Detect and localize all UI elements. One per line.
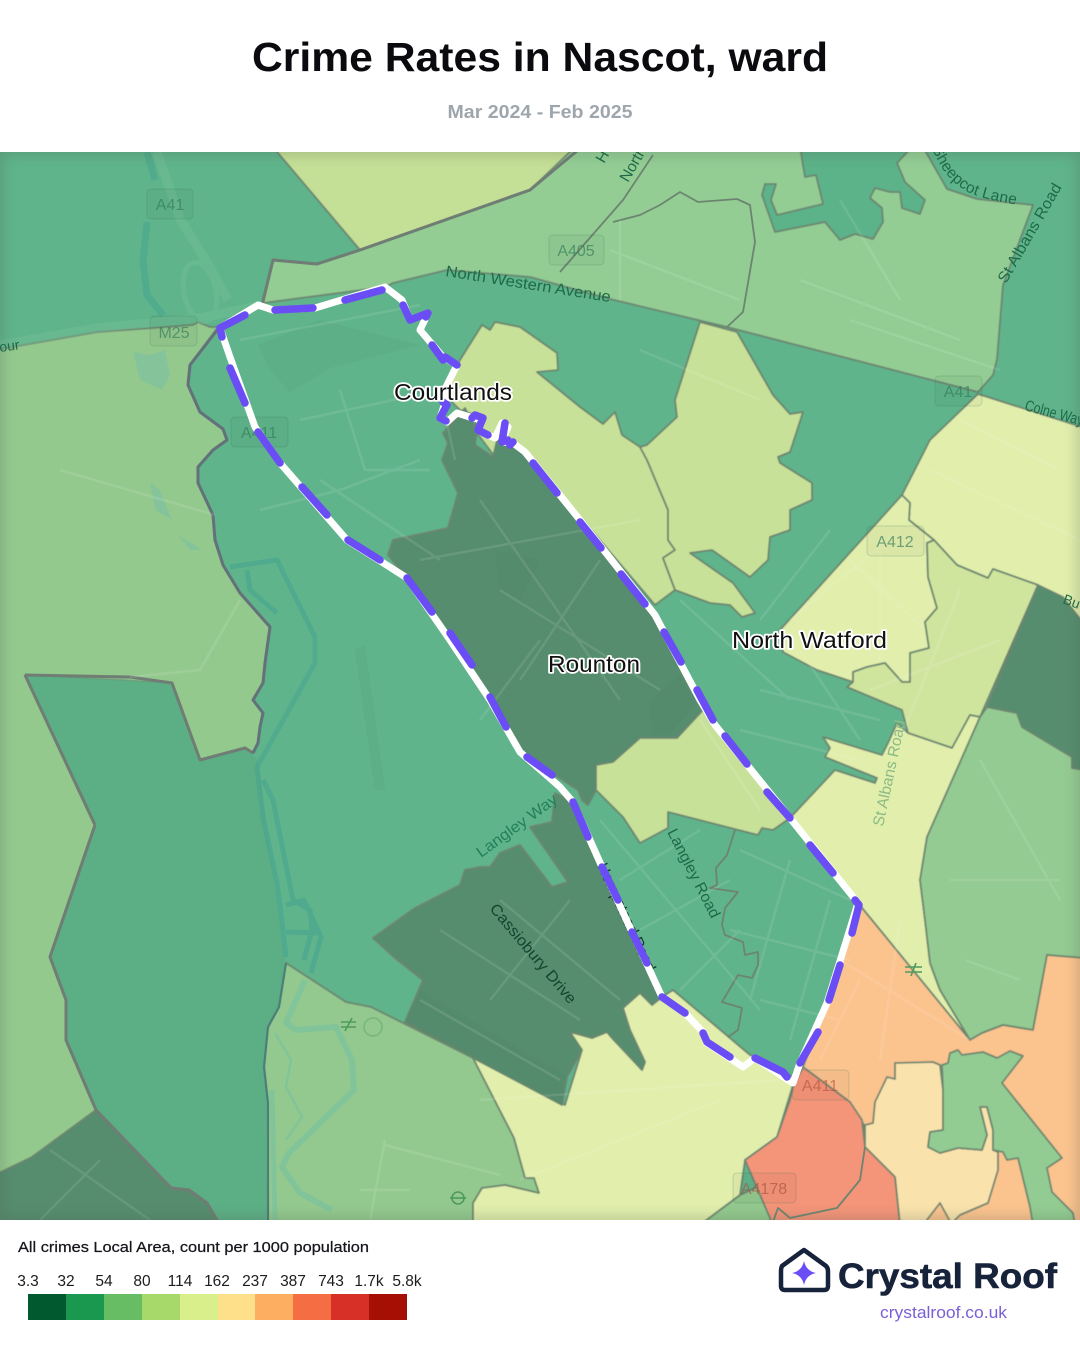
river boundary lower (264, 963, 286, 1222)
map areas (0, 147, 1080, 1225)
road names: Sheepcot Lane (934, 152, 1016, 204)
road names: Hempstead Road (593, 861, 659, 975)
area: north-east pale (902, 394, 1080, 628)
road names: St Albans Road (870, 719, 909, 828)
legend tick labels: 114 (168, 1273, 193, 1290)
darker land-use patches (258, 320, 695, 1105)
icon: house with star (781, 1250, 828, 1290)
legend colour scale (28, 1294, 407, 1320)
road names: North (617, 144, 650, 185)
logo: Crystal Roof (781, 1250, 1057, 1322)
website: crystalroof.co.uk (880, 1304, 1008, 1322)
road: highway bands (0, 152, 262, 345)
area: central south yellow green (596, 710, 790, 843)
boundary white casing (220, 287, 858, 1083)
area: north light green (263, 147, 1033, 392)
legend tick labels: 1.7k (354, 1273, 384, 1290)
road names: St Albans Road (995, 181, 1065, 286)
legend tick labels: 387 (280, 1273, 306, 1290)
road shields (147, 189, 982, 1203)
boundary purple dashes (220, 290, 859, 1077)
area: south corner green (708, 1186, 770, 1220)
road shield labels: M25 (158, 325, 190, 342)
road shield labels: A411 (241, 425, 277, 442)
subtitle: date range: Mar 2024 - Feb 2025 (448, 101, 632, 122)
legend tick labels: 743 (318, 1273, 344, 1290)
area: red (745, 1067, 900, 1225)
area: south-west block (46, 677, 165, 826)
area: Courtlands east yellow green (443, 322, 675, 605)
area boundary lines (560, 155, 865, 1222)
legend (17, 1239, 422, 1320)
area: north medium patch (762, 147, 925, 240)
road names (0, 152, 1080, 1034)
area: south-west dark (0, 1110, 218, 1225)
south river, lighter channel (272, 980, 354, 1222)
road names: Langley Road (663, 826, 723, 921)
legend tick labels: 3.3 (17, 1273, 39, 1290)
road shield labels: A411 (802, 1078, 838, 1095)
area: east yellow green (847, 540, 1038, 748)
vignette (0, 148, 1080, 1224)
area: Rounton dark (388, 408, 703, 805)
road names: Cassiobury Drive (486, 901, 579, 1007)
rivers (143, 152, 321, 973)
area: west light green (0, 322, 270, 1175)
legend tick labels: 5.8k (392, 1273, 422, 1290)
area: south-east green (928, 1050, 1075, 1225)
area: small orange (925, 1202, 951, 1220)
wordmark: Crystal Roof (838, 1257, 1057, 1296)
area: east light green (920, 707, 1080, 1040)
area: south pale (473, 990, 793, 1225)
area: A412 pale (780, 495, 937, 682)
street network (40, 200, 1080, 1220)
road names: Langley Way (473, 791, 561, 861)
heavier administrative borders (25, 150, 578, 1222)
place labels: Courtlands (394, 379, 512, 405)
area: St Albans Road pale (790, 715, 980, 1040)
place labels: North Watford (732, 627, 887, 653)
legend tick labels: 237 (242, 1273, 268, 1290)
rail station markers (341, 963, 922, 1204)
ward boundary: Nascot (220, 287, 859, 1083)
lakes (133, 350, 202, 550)
area: north-west yellow green (273, 147, 575, 250)
legend tick labels: 80 (133, 1273, 151, 1290)
river boundary line (188, 329, 270, 753)
legend tick labels: 32 (57, 1273, 75, 1290)
legend tick labels: 54 (95, 1273, 113, 1290)
road names: H (593, 148, 613, 166)
legend tick labels (17, 1273, 422, 1290)
road shield labels: A405 (557, 243, 595, 260)
title: Crime Rates in Nascot, ward (252, 34, 828, 80)
road shield labels: A4178 (741, 1181, 787, 1198)
place labels (394, 379, 887, 677)
area: pale orange (865, 1062, 998, 1225)
road names: North Western Avenue (444, 263, 612, 306)
legend title: All crimes Local Area, count per 1000 population (18, 1239, 369, 1256)
area: Cassiobury dark (373, 793, 662, 1105)
place labels: Rounton (548, 651, 640, 677)
area: south light green (264, 963, 539, 1225)
road shield labels (156, 197, 972, 1198)
area: east dark (987, 585, 1080, 770)
road shield labels: A41 (156, 197, 184, 214)
road shield labels: A41 (944, 384, 972, 401)
road shield labels: A412 (876, 534, 914, 551)
area: central north yellow green (640, 322, 812, 617)
area: orange (803, 903, 1080, 1225)
legend tick labels: 162 (204, 1273, 230, 1290)
